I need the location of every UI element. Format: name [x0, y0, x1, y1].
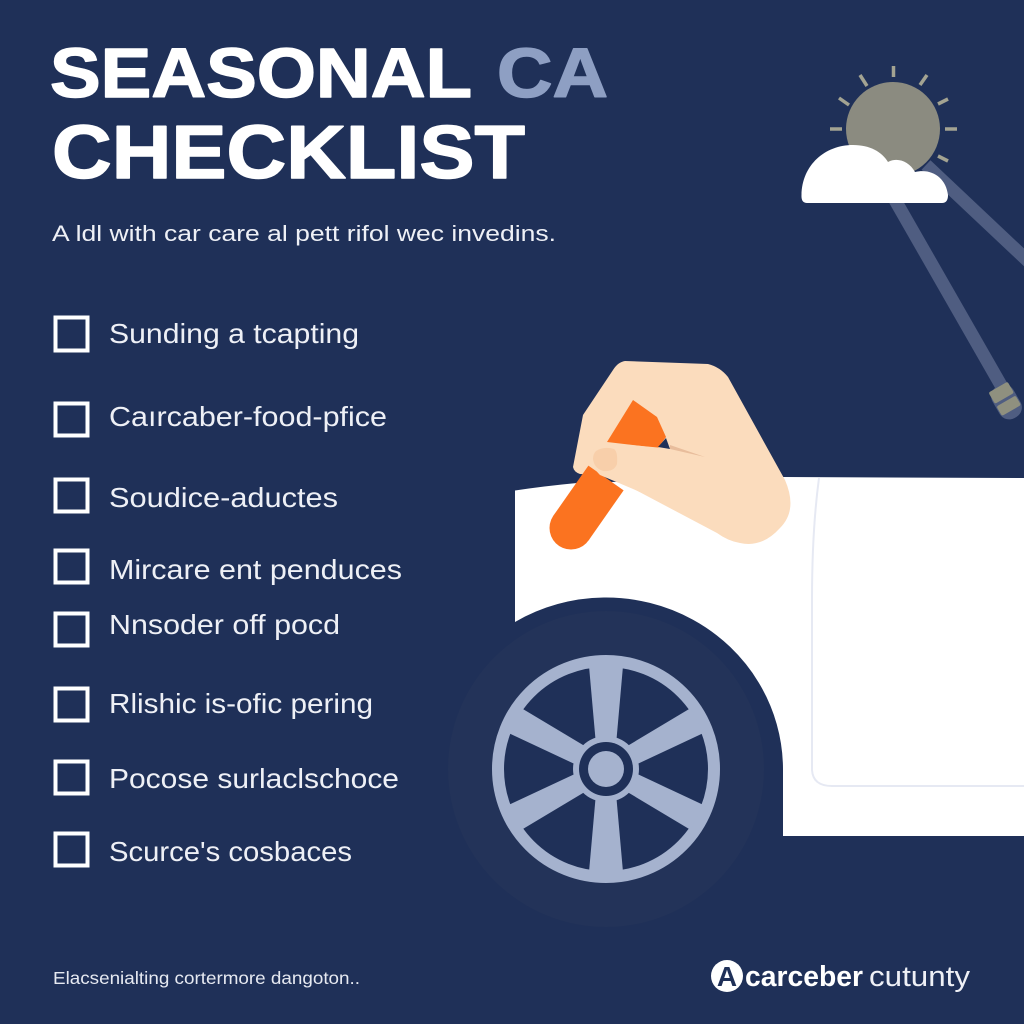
checklist item 7: Pocose surlaclschoce: [109, 763, 399, 794]
spokes: [508, 666, 704, 872]
title: SEASONAL: [50, 34, 472, 112]
sun disc: [846, 82, 940, 176]
finger gap: [658, 438, 670, 449]
checklist item 4: [56, 550, 402, 585]
hand holding orange marker: [550, 361, 790, 550]
icon: sun behind cloud: [801, 66, 957, 203]
subtitle: A ldl with car care al pett rifol wec invedins.: [52, 221, 556, 246]
logo badge: A: [717, 961, 737, 992]
cloud: [801, 145, 948, 203]
hub: [573, 736, 639, 802]
checklist item 6: Rlishic is-ofic pering: [109, 688, 373, 719]
brand name: carceber: [745, 961, 863, 993]
marker: [550, 400, 666, 550]
car body: [515, 477, 1024, 836]
rim: [498, 661, 714, 877]
checklist item 1: Sunding a tcapting: [109, 318, 359, 349]
finger crease: [670, 445, 705, 457]
checklist item 2: [56, 401, 387, 436]
wiper handle: [987, 380, 1024, 423]
wheel: [448, 611, 764, 927]
logo badge: [711, 960, 743, 992]
thumb: [592, 443, 705, 500]
title: [50, 34, 608, 194]
title: CHECKLIST: [52, 110, 525, 194]
checklist item 4: Mircare ent penduces: [109, 554, 402, 585]
brand name: cutunty: [869, 961, 971, 993]
brand logo: [711, 960, 971, 993]
thumbnail: [593, 448, 617, 471]
checklist item 2: Caırcaber-food-pfice: [109, 401, 387, 432]
checklist item 3: Soudice-aductes: [109, 482, 338, 513]
brand name: [745, 961, 971, 993]
hand: [573, 361, 790, 544]
door outline: [812, 478, 1024, 786]
sun rays: [830, 66, 957, 161]
checklist: [56, 318, 402, 867]
title: CA: [497, 34, 608, 112]
checklist item 5: Nnsoder off pocd: [109, 609, 340, 640]
footer note: Elacsenialting cortermore dangoton..: [53, 968, 360, 988]
tire: [448, 611, 764, 927]
checklist item 8: Scurce's cosbaces: [109, 836, 352, 867]
checklist item 5: [56, 609, 340, 646]
icon: wiper arms: [895, 165, 1024, 423]
checklist item 3: [56, 480, 338, 513]
